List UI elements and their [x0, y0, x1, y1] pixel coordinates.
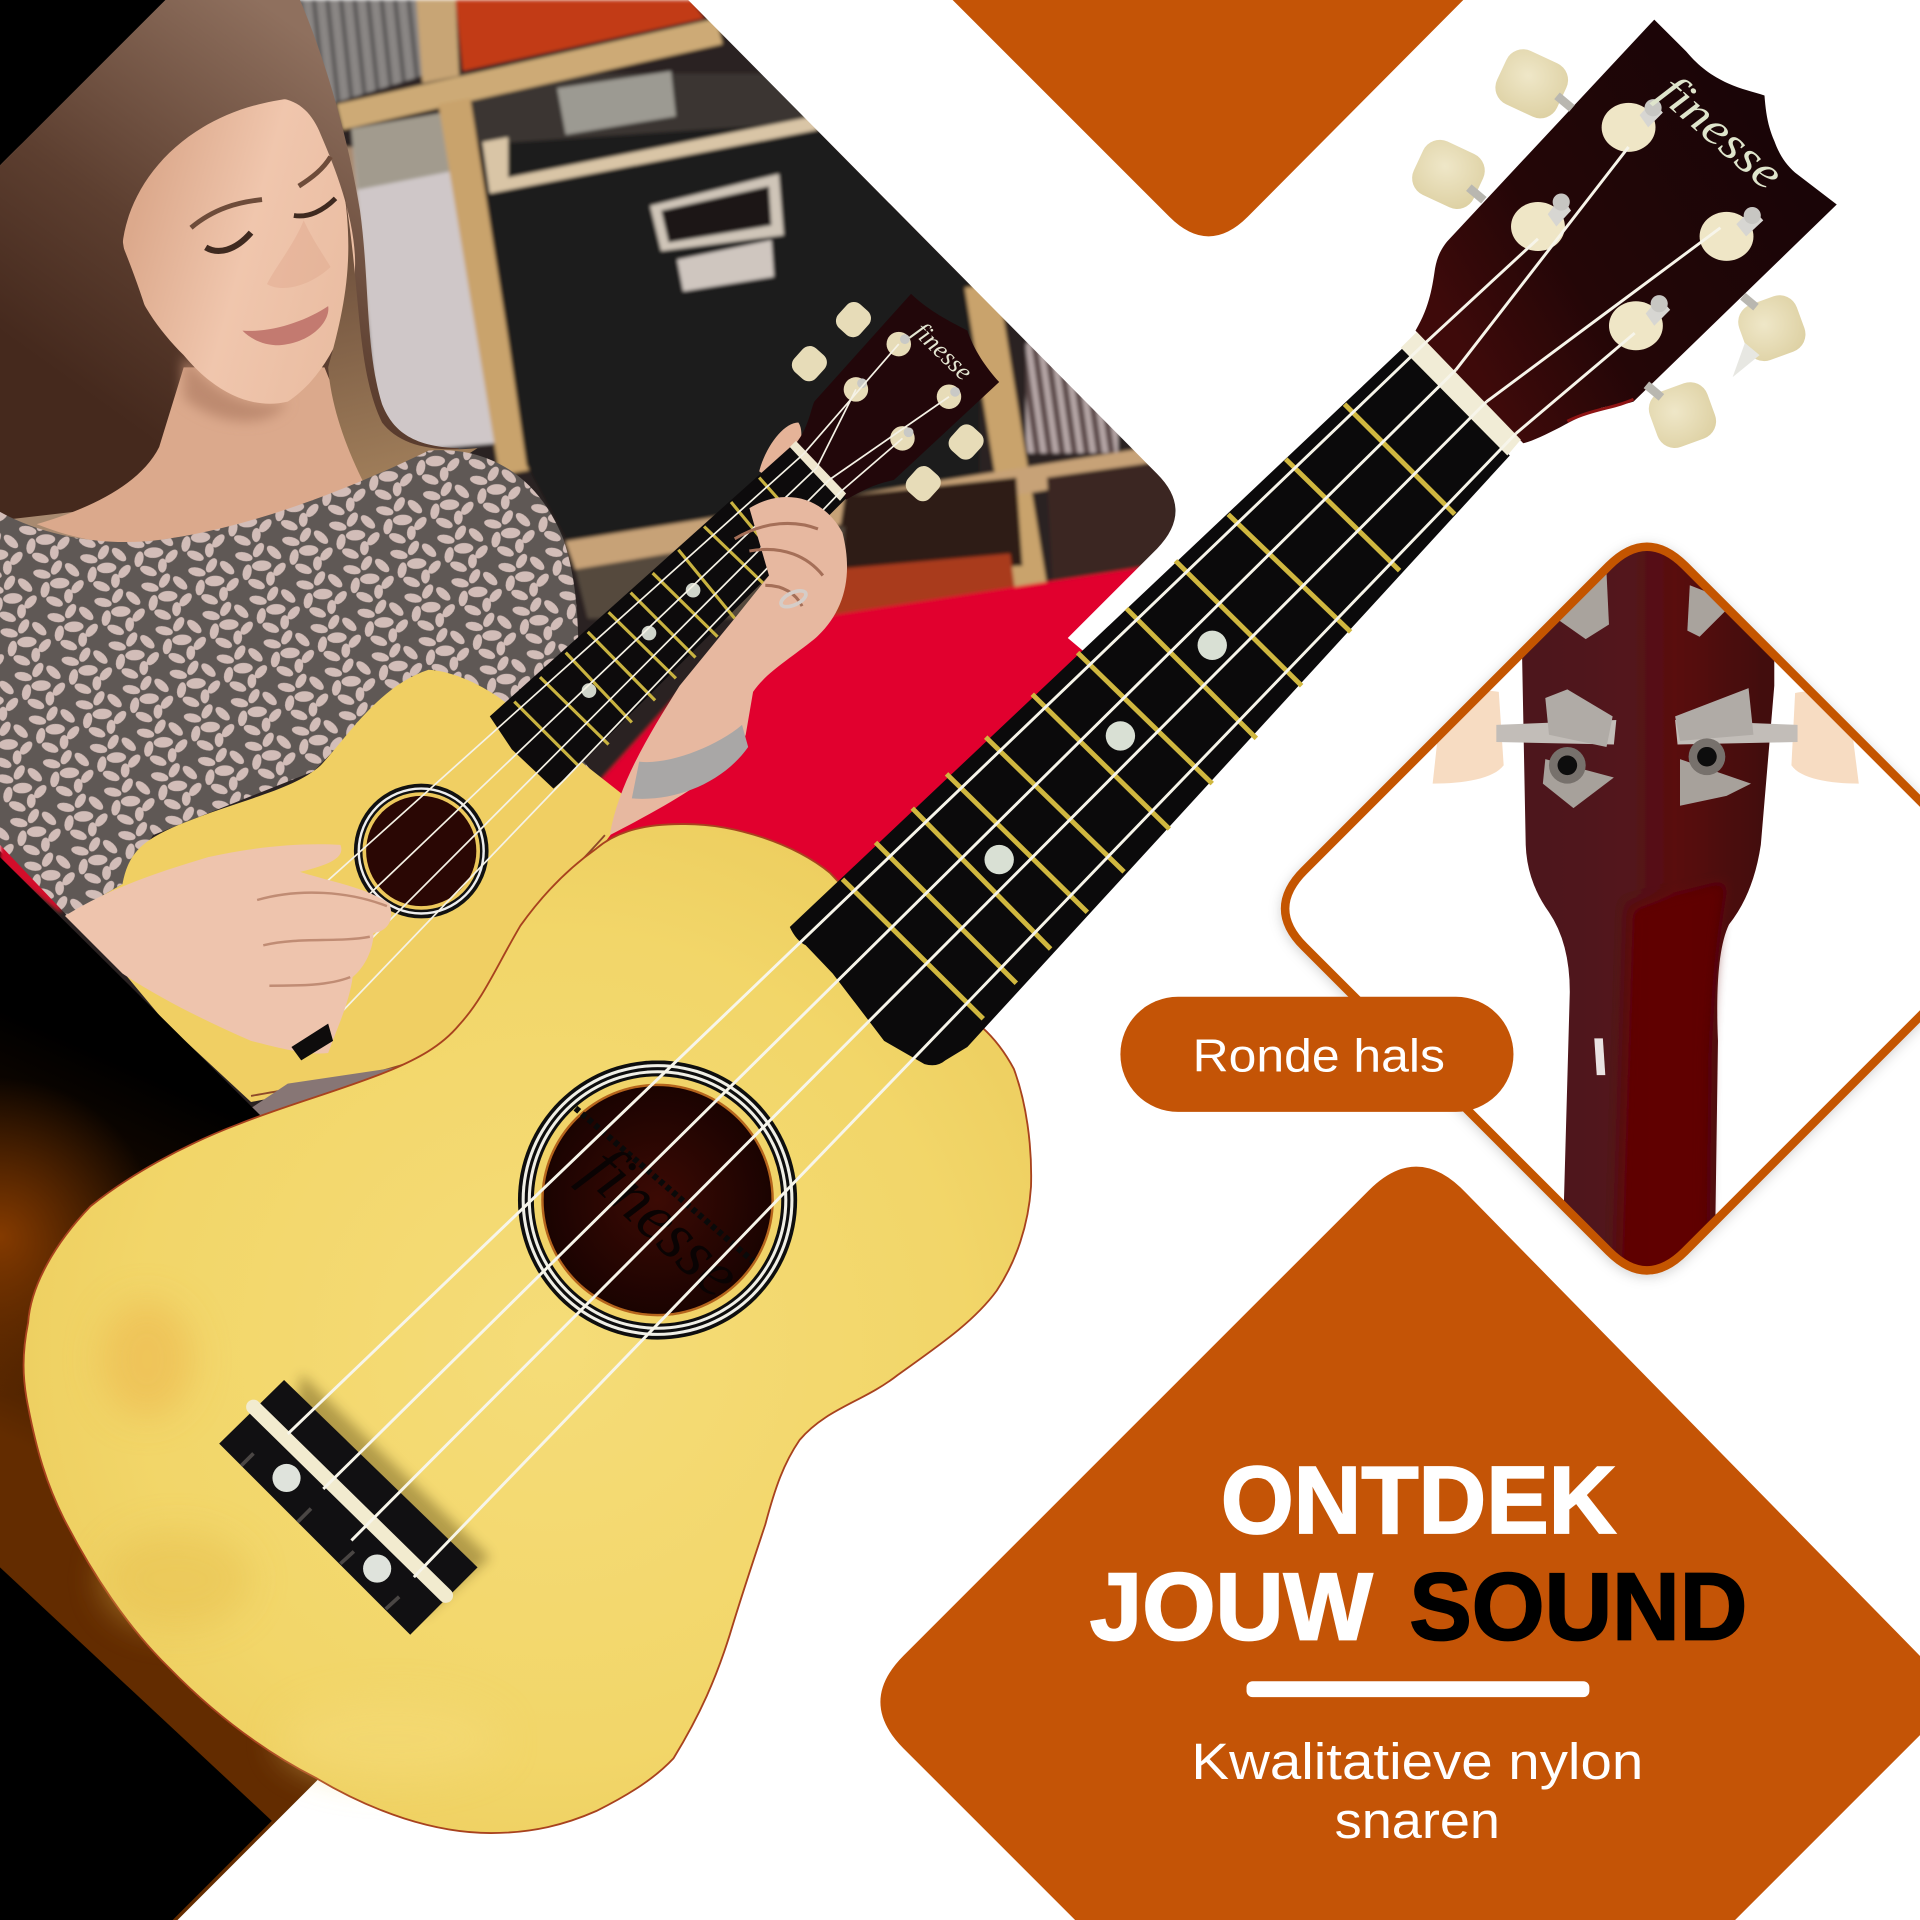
ukulele nut — [1401, 332, 1521, 456]
small ukulele: fretboard — [490, 441, 846, 789]
subtitle: nylon strings — [1191, 1732, 1643, 1849]
ukulele headstock — [1406, 20, 1837, 453]
wood tone patches — [100, 1300, 502, 1780]
small ukulele: body — [73, 670, 624, 1102]
neck back photo — [1433, 527, 1859, 1298]
woman: front hair strands — [122, 98, 286, 306]
tuner right — [1675, 585, 1859, 806]
panel: round neck detail — [1285, 527, 1920, 1298]
divider — [1247, 1681, 1589, 1697]
small ukulele: sound hole — [354, 784, 489, 918]
brand logo on headstock: finesse — [1648, 65, 1793, 200]
neck detail outline — [1285, 547, 1920, 1270]
callout: Ronde hals — [1120, 997, 1513, 1112]
small ukulele: headstock — [788, 294, 999, 505]
orange diamond top — [953, 0, 1463, 236]
panel: lifestyle photo of woman playing ukulele — [0, 0, 1176, 1115]
woman: skirt edge — [252, 1068, 394, 1115]
tuning pegs — [1511, 99, 1763, 350]
woman: lace dress — [0, 450, 615, 916]
orange panel bottom right — [880, 1167, 1920, 1920]
photo background: shelves — [0, 0, 1176, 1115]
small ukulele: headstock: finesse — [908, 317, 979, 386]
ukulele sound hole — [518, 1060, 797, 1340]
subtitle: nylon strings: Kwalitatieve nylon — [1191, 1732, 1643, 1790]
dark gradient panel lower left — [0, 851, 392, 1920]
woman: hair — [0, 0, 459, 520]
tuner left — [1433, 573, 1616, 808]
heading: ontdek jouw sound: ONTDEK — [1221, 1448, 1616, 1554]
heading: ontdek jouw sound — [1090, 1448, 1747, 1661]
heading: ontdek jouw sound: SOUND — [1409, 1555, 1747, 1661]
woman: face — [122, 98, 355, 421]
small ukulele: body edge — [251, 835, 605, 1096]
callout: Ronde hals: Ronde hals — [1193, 1029, 1445, 1081]
ukulele sound hole: finesse — [570, 1131, 756, 1312]
ukulele fretboard — [790, 347, 1510, 1065]
tuning knobs — [1406, 43, 1811, 453]
black corner top left — [0, 0, 171, 171]
subtitle: nylon strings: snaren — [1335, 1791, 1500, 1849]
small ukulele: thumb behind neck — [759, 422, 802, 473]
woman: fretting hand and forearm — [610, 497, 847, 835]
ukulele body — [24, 824, 1031, 1833]
ukulele strings — [288, 147, 1720, 1577]
heading: ontdek jouw sound: JOUW — [1090, 1555, 1374, 1661]
small ukulele: strings — [306, 344, 949, 1026]
woman: neck and chest — [37, 367, 386, 543]
ukulele bridge — [219, 1374, 490, 1635]
woman: plucking hand — [65, 844, 391, 1060]
